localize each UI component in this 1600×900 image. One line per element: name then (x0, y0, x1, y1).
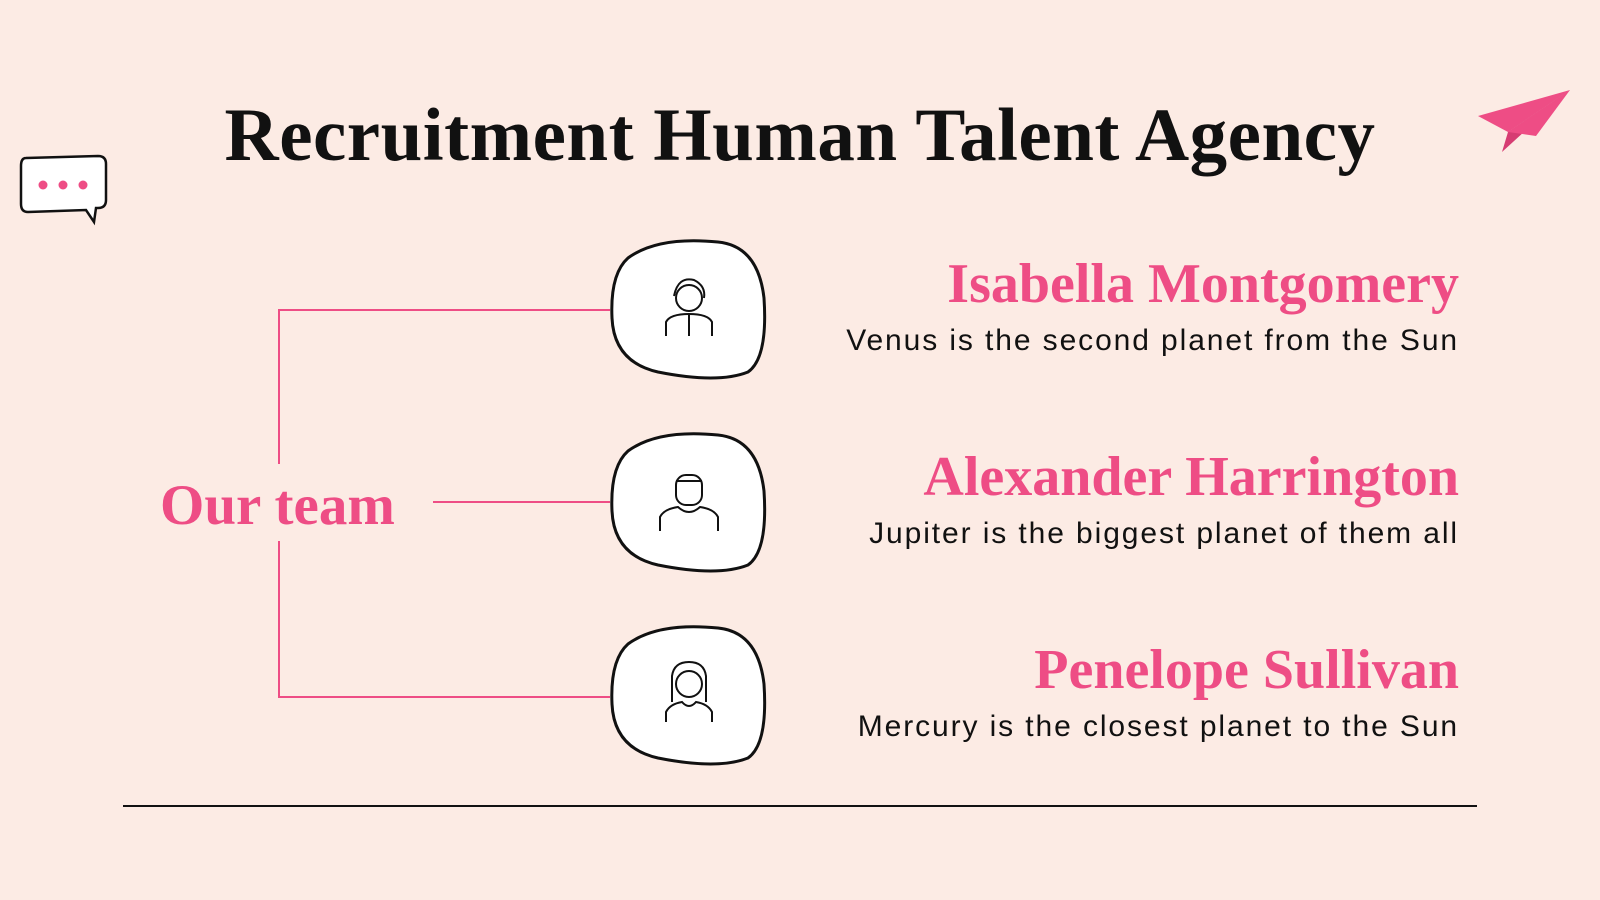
avatar blob 1 (610, 239, 766, 380)
icon: chat bubble (20, 154, 108, 226)
member 3 (858, 639, 1459, 743)
icon: paper plane (1478, 90, 1570, 152)
avatar blob 2 (610, 432, 766, 572)
title: Recruitment Human Talent Agency (225, 94, 1375, 177)
name 2: Alexander Harrington (923, 446, 1459, 508)
member 1 (846, 253, 1459, 357)
name 3: Penelope Sullivan (1034, 639, 1459, 701)
avatar blob 3 (610, 625, 766, 766)
desc 1: Venus is the second planet from the Sun (846, 324, 1459, 357)
desc 2: Jupiter is the biggest planet of them all (869, 517, 1459, 550)
desc 3: Mercury is the closest planet to the Sun (858, 710, 1459, 743)
member 2 (869, 446, 1459, 550)
label: our team: Our team (160, 474, 395, 537)
name 1: Isabella Montgomery (947, 253, 1459, 315)
